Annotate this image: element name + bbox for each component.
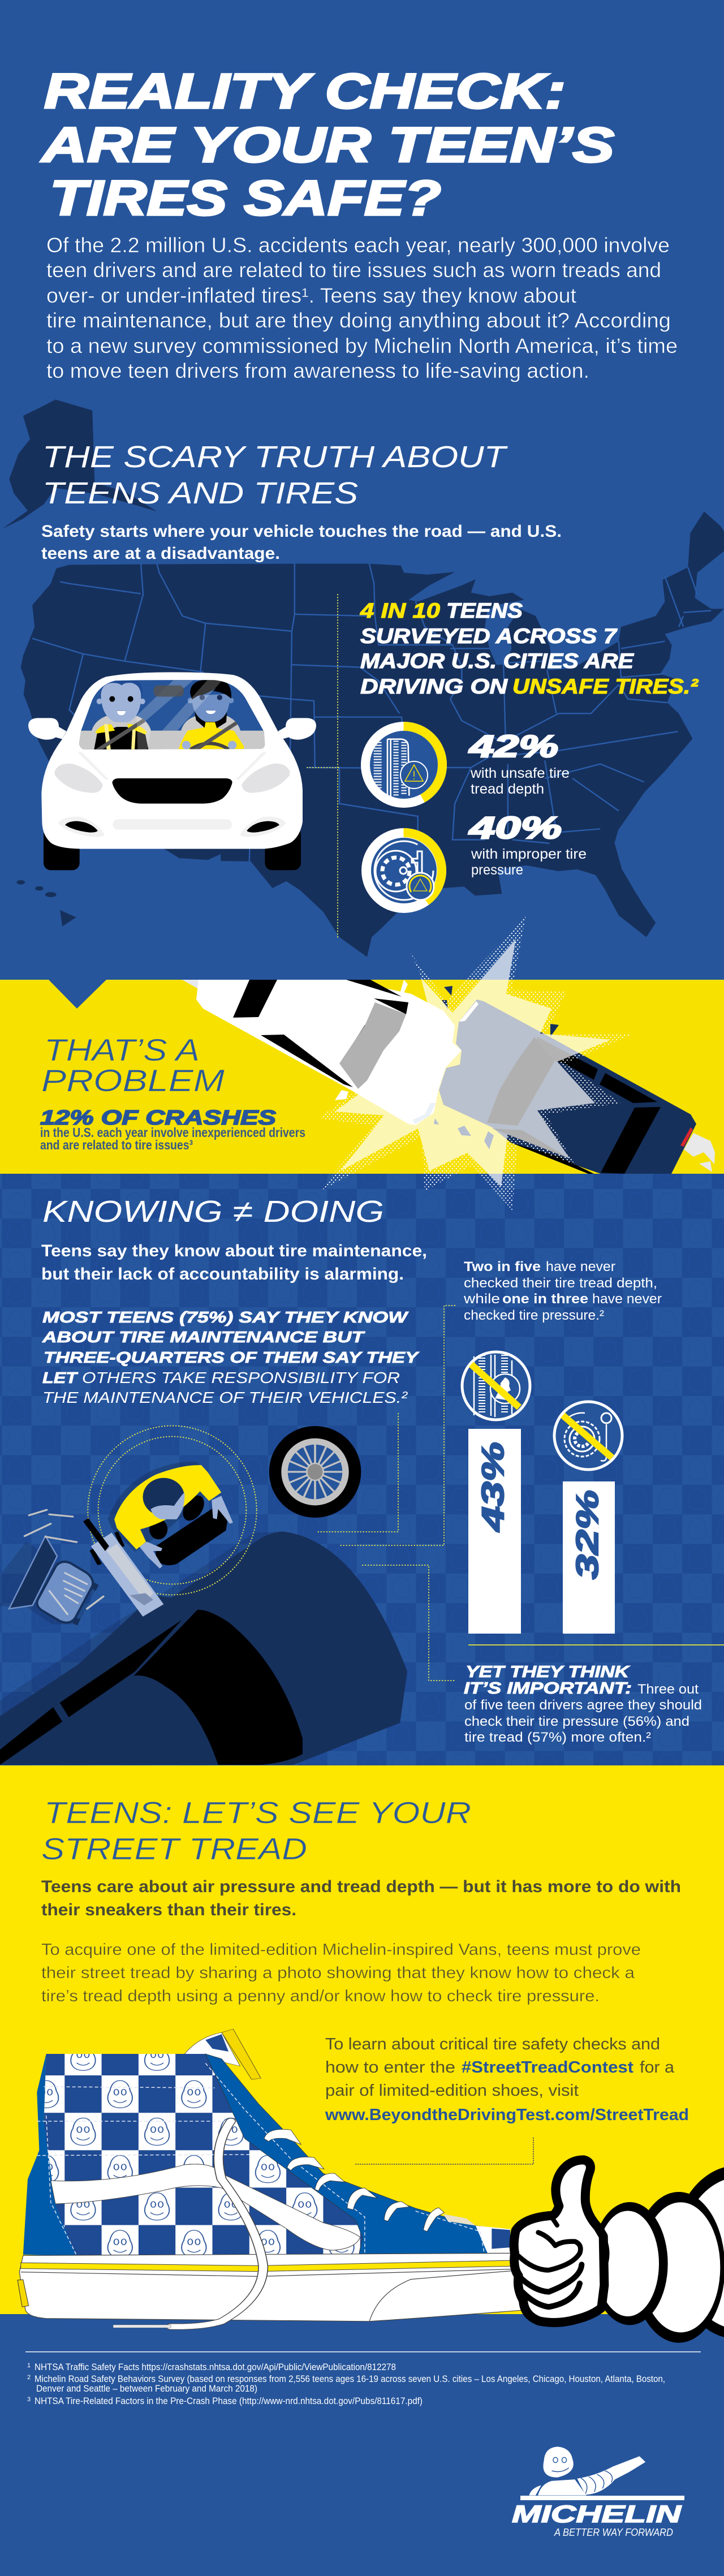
toolbox [9,1536,98,1626]
crash: white car shadow [182,980,226,996]
subheading: teens care [41,1877,681,1919]
stat caption: crashes: in the U.S. each year involve inexperienced drivers [40,1125,305,1140]
icon: pressure no-check [554,1402,622,1470]
crash: translucent burst [335,939,611,1187]
jack tool [83,1518,163,1617]
text: yet they think: Three out [637,1682,699,1697]
mechanic work area dotted circles [88,1426,257,1595]
callout: most teens 75%: THREE-QUARTERS OF THEM SAY THEY [44,1349,420,1366]
stat: 12% of crashes: 12% OF CRASHES [40,1106,276,1129]
sneaker heel tab [18,2280,29,2307]
text: two in five: Two in five [464,1259,541,1274]
illustration: teen drivers in white car [28,672,316,870]
icon: pressure warning [407,873,434,900]
callout: most teens 75% [42,1308,420,1406]
statistic headline: 4 in 10 teens: DRIVING ON [360,675,508,698]
crash: red tail light [680,1127,693,1147]
loose wrenches [25,1510,104,1609]
illustration: white car in crash [182,980,462,1125]
text: to learn about: www.BeyondtheDrivingTest.com/StreetTread [325,2106,689,2124]
crash: exhaust smoke [684,1133,715,1172]
sneaker tongue [185,2032,240,2066]
crash: navy mirrors [442,986,559,1037]
subheading: safety starts [41,522,562,563]
panel: yellow street tread section [0,1765,724,2314]
finger lines [519,2219,608,2308]
text: yet they think: YET THEY THINK [466,1663,630,1681]
heading: that's a problem: THAT’S A [44,1032,200,1067]
illustration: navy car in crash [439,986,715,1174]
footnotes: 1 [27,2362,31,2369]
crash: halftone burst [318,915,635,1211]
lower bumper [113,819,232,830]
text: yet they think: IT’S IMPORTANT: [464,1679,632,1698]
map: Hawaii [16,880,76,927]
spare tire and wheel [269,1426,361,1518]
heading: let's see your street tread [41,1796,471,1866]
bar: 43% [468,1429,521,1634]
statistic headline: 4 in 10 teens: 4 IN 10 [360,599,440,622]
subheading: safety starts: teens are at a disadvantage. [41,544,280,563]
logo: Michelin [512,2446,684,2538]
windshield and occupants [77,679,268,751]
icon: tire tread [378,739,409,796]
intro paragraph: tire maintenance, but are they doing anything about it? According [46,309,671,332]
icon: tread no-check [462,1352,530,1420]
heading: let's see your street tread: STREET TREAD [41,1832,307,1866]
passenger [92,680,151,751]
car wheel black [133,1610,303,1765]
car body navy [0,1532,407,1765]
heading: let's see your street tread: TEENS: LET’S SEE YOUR [44,1796,471,1830]
map: state borders [32,564,711,861]
dotted connector lines [316,1306,456,1681]
footnotes: 3 [27,2396,31,2403]
text: to learn about: pair of limited-edition shoes, visit [325,2082,579,2100]
statistic headline: 4 in 10 teens: SURVEYED ACROSS 7 [360,624,618,648]
text: to learn about: for a [640,2058,675,2077]
text: to learn about [325,2035,689,2124]
text: two in five: checked tire pressure.² [464,1308,604,1323]
text: yet they think [464,1663,702,1745]
stat caption: pressure: pressure [471,862,523,878]
dotted connector lines [307,595,339,937]
bar: 32% [563,1481,615,1634]
text: to acquire: their street tread by sharing a photo showing that they know how to check a [41,1964,635,1982]
arm segment one [592,2202,668,2325]
footnotes [27,2362,665,2406]
text: two in five [463,1259,662,1323]
bar chart baseline [468,1644,724,1645]
subheading: teens care: their sneakers than their tires. [41,1901,296,1919]
footnotes: NHTSA Traffic Safety Facts https://crashstats.nhtsa.dot.gov/Api/Public/ViewPublication/812278 [35,2362,396,2372]
icon: warning [400,761,428,789]
text: yet they think: of five teen drivers agree they should [464,1698,702,1713]
car headlights [55,764,290,793]
callout: most teens 75%: OTHERS TAKE RESPONSIBILITY FOR [82,1369,400,1386]
background: checkered section [0,1174,724,1765]
subheading: teens say they know [41,1242,427,1283]
background: bottom blue section [0,2314,724,2576]
heading: the scary truth: TEENS AND TIRES [42,476,358,510]
text: to learn about: #StreetTreadContest [462,2058,634,2077]
statistic headline: 4 in 10 teens [360,599,699,698]
stat caption: pressure: with improper tire [471,846,587,862]
text: two in five: have never [546,1259,615,1274]
statistic headline: 4 in 10 teens: TEENS [446,599,523,622]
sneaker sole lines [21,2269,515,2321]
text: to learn about: how to enter the [325,2058,455,2077]
donut: 40% improper pressure [361,828,446,913]
text: two in five: one in three [502,1291,588,1307]
map of the United States [2,399,724,957]
donut: 42% unsafe tread [361,722,447,808]
stat caption: tread: with unsafe tire [470,765,570,781]
crash: hood panels and debris [434,1001,570,1158]
intro paragraph: teen drivers and are related to tire issues such as worn treads and [46,259,661,282]
logo: bar [520,2496,684,2500]
arm segment three [672,2165,724,2339]
logo: wordmark: MICHELIN [512,2501,682,2528]
hood creases [77,752,267,779]
dotted connector line [356,2136,533,2164]
windshield reflection [137,680,222,751]
sneaker lace bars [264,2129,444,2232]
logo: tagline: A BETTER WAY FORWARD [554,2527,673,2538]
crash: pale trim [412,1103,436,1124]
sneaker front panel [205,2054,510,2260]
heading: that's a problem: PROBLEM [41,1063,225,1098]
stat: 42% [469,729,570,797]
footnotes: Denver and Seattle – between February and March 2018) [36,2383,257,2394]
arm segment two [632,2192,724,2343]
footnotes rule [25,2351,701,2352]
text: to learn about: To learn about critical tire safety checks and [325,2035,660,2053]
hand and thumb [514,2160,604,2323]
mechanic yellow shirt [114,1465,221,1549]
sneaker sole [19,2253,529,2321]
footnotes: NHTSA Tire-Related Factors in the Pre-Crash Phase (http://www-nrd.nhtsa.dot.gov/Pubs/811617.pdf) [35,2396,423,2406]
callout: most teens 75%: THE MAINTENANCE OF THEIR VEHICLES.² [42,1389,408,1406]
bar: 43%: 43% [475,1442,510,1532]
sneaker yellow foxing stripe [21,2260,510,2272]
creeper tire [156,1508,227,1565]
driver [178,680,244,751]
car tires [44,828,301,870]
sneaker tongue opening [443,2214,476,2226]
intro paragraph: over- or under-inflated tires¹. Teens say they know about [46,284,577,307]
illustration: Michelin sneaker [18,2029,529,2328]
heading: that's a problem [41,1032,225,1098]
bar: 32%: 32% [570,1490,605,1579]
stat: 40% [469,810,587,878]
toolbox shadow [0,1541,96,1625]
illustration: Michelin thumbs-up hand [514,2160,724,2343]
statistic headline: 4 in 10 teens: UNSAFE TIRES.² [512,675,699,698]
crash: black windows [511,1037,661,1174]
text: two in five: checked their tire tread depth, [464,1276,657,1291]
title: REALITY CHECK: [44,64,566,119]
sneaker lace tip [113,2325,171,2328]
subheading: teens say they know: Teens say they know about tire maintenance, [41,1242,427,1260]
text: yet they think: tire tread (57%) more often.² [464,1730,651,1745]
car trim black [0,1620,182,1765]
text: to acquire: To acquire one of the limited-edition Michelin-inspired Vans, teens must prove [41,1941,641,1959]
title: ARE YOUR TEEN’S [40,118,614,173]
subheading: teens say they know: but their lack of accountability is alarming. [41,1265,404,1283]
rearview mirror [154,686,184,697]
illustration: mechanic and car [0,1426,407,1765]
panel: yellow crash band [0,980,724,1174]
bar chart: never checked [462,1352,724,1645]
text: two in five: have never [592,1291,662,1307]
callout: most teens 75%: LET [42,1369,79,1386]
heading: knowing does not equal doing: KNOWING ≠ DOING [42,1195,384,1229]
statistic headline: 4 in 10 teens: MAJOR U.S. CITIES ARE [360,649,634,673]
sneaker checker upper [37,2052,369,2260]
car grille [112,778,232,804]
subheading: safety starts: Safety starts where your vehicle touches the road — and U.S. [41,522,562,541]
stat: 40%: 40% [469,810,562,845]
title [40,64,614,226]
sneaker toe checker [476,2226,510,2258]
subheading: teens care: Teens care about air pressure and tread depth — but it has more to do with [41,1877,681,1896]
logo: Bibendum mascot [529,2446,645,2496]
fog lamps [58,817,286,837]
sneaker side stripe [51,2164,360,2250]
icon: wheel and gauge [374,841,433,900]
map: contiguous states [21,511,724,957]
crash: navy body [439,1000,696,1174]
stat caption: pressure [471,846,587,878]
mechanic head [143,1478,184,1516]
intro paragraph [46,234,678,382]
sneaker loose lace [171,2121,263,2327]
text: to acquire [41,1941,641,2005]
intro paragraph: to move teen drivers from awareness to life-saving action. [46,359,589,382]
sneaker heel panel [23,2054,76,2256]
crash: gray glass [339,1002,406,1089]
stat caption: tread: tread depth [471,781,544,797]
mechanic shadow [108,1462,213,1552]
arrow: section pointer [49,980,106,1009]
car shadow [0,1532,283,1765]
crash: white car mirrors [335,980,408,1100]
stat caption: crashes [40,1125,305,1152]
stat caption: crashes: and are related to tire issues³ [40,1138,193,1152]
sneaker yellow tongue label [222,2029,261,2079]
seatbelts [95,718,238,751]
text: to acquire: tire’s tread depth using a penny and/or know how to check tire pressure. [41,1987,600,2005]
footnotes: 2 [27,2374,31,2381]
stat: 42%: 42% [469,729,558,764]
text: yet they think: check their tire pressure (56%) and [464,1714,689,1729]
mechanic arms [139,1496,233,1569]
car body [41,672,303,849]
background: top blue section [0,0,724,980]
map: Alaska [2,399,157,529]
callout: most teens 75%: ABOUT TIRE MAINTENANCE BUT [42,1328,366,1346]
intro paragraph: to a new survey commissioned by Michelin North America, it’s time [46,334,678,357]
crash: windshield black [233,980,408,1087]
heading: the scary truth: THE SCARY TRUTH ABOUT [42,440,508,474]
footnotes: Michelin Road Safety Behaviors Survey (based on responses from 2,556 teens ages 16-19 across seven U.S. cities – Los Angeles, Chicago, Houston, Atlanta, Boston, [35,2373,665,2384]
title: TIRES SAFE? [50,171,441,226]
car mirrors [28,718,316,740]
heading: the scary truth [42,440,508,510]
text: two in five: while [463,1291,500,1307]
crash: white body [196,980,462,1125]
intro paragraph: Of the 2.2 million U.S. accidents each year, nearly 300,000 involve [46,234,670,257]
callout: most teens 75%: MOST TEENS (75%) SAY THEY KNOW [42,1308,409,1326]
sneaker stitching [37,2063,485,2258]
stat caption: tread [470,765,570,797]
